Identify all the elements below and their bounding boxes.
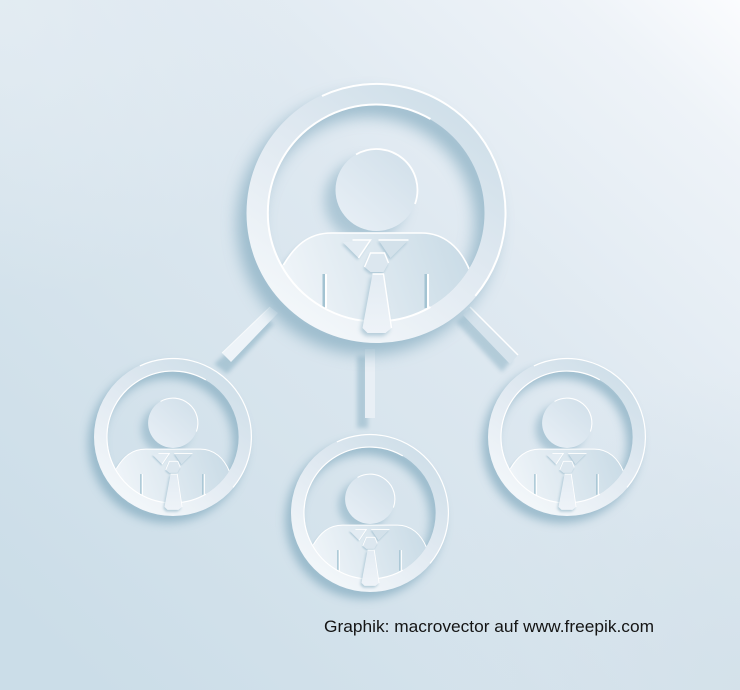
- image credit: Graphik: macrovector auf www.freepik.com: [324, 618, 654, 636]
- connector: left: [214, 307, 278, 374]
- ring highlights: [268, 84, 506, 322]
- body and sleeve lines: [274, 233, 474, 347]
- node: left employee: [89, 358, 252, 523]
- ring: [246, 83, 506, 343]
- head: [336, 149, 418, 231]
- tie: [360, 253, 392, 336]
- node: centre employee: [286, 434, 449, 599]
- connector: centre: [357, 349, 375, 428]
- person figure: [274, 149, 474, 347]
- node: right employee: [483, 358, 646, 523]
- ring shadow: [238, 94, 498, 354]
- sleeve lines: [322, 274, 429, 308]
- connector: right: [456, 307, 518, 372]
- head shadow: [324, 159, 406, 241]
- collars: [342, 240, 408, 260]
- node: top manager: [238, 83, 506, 354]
